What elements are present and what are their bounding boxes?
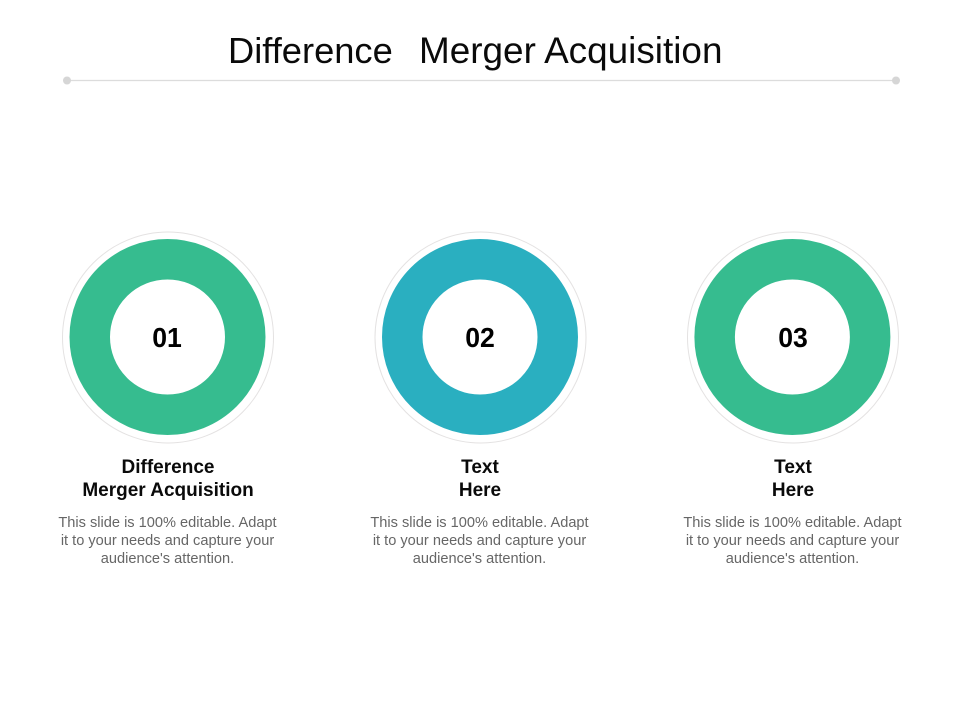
description 01: [58, 515, 277, 567]
heading 02: [459, 457, 501, 501]
heading 01: Merger Acquisition: [82, 480, 254, 501]
heading 02: Text: [461, 457, 499, 478]
donut 01: [62, 232, 274, 444]
description 03: This slide is 100% editable. Adapt: [683, 515, 902, 531]
title: Merger Acquisition: [419, 30, 722, 71]
description 03: it to your needs and capture your: [686, 533, 899, 549]
description 02: [370, 515, 589, 567]
heading 01: Difference: [122, 457, 214, 478]
heading 03: Text: [774, 457, 812, 478]
donut 03: [687, 232, 899, 444]
heading 03: [772, 457, 814, 501]
heading 01: [82, 457, 254, 501]
description 02: audience's attention.: [413, 551, 546, 567]
description 02: This slide is 100% editable. Adapt: [370, 515, 589, 531]
title: Difference: [228, 30, 393, 71]
title: [228, 30, 722, 71]
description 03: [683, 515, 902, 567]
title divider: [63, 76, 900, 84]
description 01: audience's attention.: [101, 551, 234, 567]
number 03: 03: [778, 322, 808, 352]
description 03: audience's attention.: [726, 551, 859, 567]
description 01: it to your needs and capture your: [61, 533, 274, 549]
number 01: 01: [152, 322, 181, 352]
donut 02: [374, 232, 586, 444]
heading 02: Here: [459, 480, 501, 501]
description 01: This slide is 100% editable. Adapt: [58, 515, 277, 531]
heading 03: Here: [772, 480, 814, 501]
number 02: 02: [465, 322, 495, 352]
description 02: it to your needs and capture your: [373, 533, 586, 549]
